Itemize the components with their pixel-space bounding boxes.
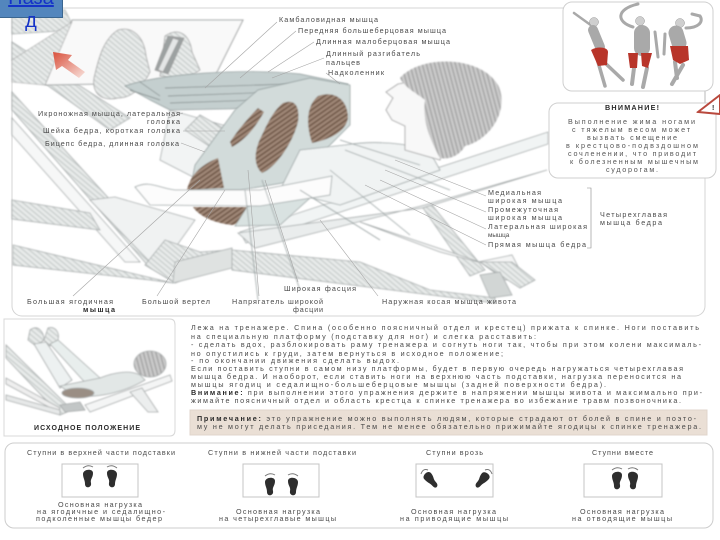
column: feet at top of platform: Основная нагрузка [58,500,142,509]
labels: upper muscle names: Надколенник [328,68,385,77]
labels: upper muscle names: пальцев [326,58,360,67]
labels: quadriceps group: Латеральная широкая [488,222,587,231]
illustration: woman's head [386,62,502,160]
column: feet together: Основная нагрузка [580,507,664,516]
panel: foot positions [5,443,713,528]
labels: lower muscle names: фасции [293,305,323,314]
labels: left muscle names: Бицепс бедра, длинная головка [45,139,179,148]
muscle: gluteus [193,207,247,225]
warning text: вызвать смещение [587,133,677,142]
labels: quadriceps group: мышца [488,232,510,239]
column: feet together: на отводящие мышцы [572,514,672,523]
labels: quadriceps group: Прямая мышца бедра [488,240,586,249]
labels: lower muscle names [27,284,516,314]
illustration: starting position drawing [6,328,172,415]
icon: feet low [265,474,298,495]
column: feet apart: на приводящие мышцы [400,514,508,523]
labels: upper muscle names: Передняя большеберцовая мышца [298,26,446,35]
warning text [566,103,698,174]
icon: red arrow [53,52,85,78]
muscle: middle quadriceps [256,102,298,173]
text block: instructions: на специальную платформу (подставку для ног) и слегка расставить: [191,332,536,341]
text block: instructions: Если поставить ступни в самом низу платформы, будет в первую очередь нагружаться четырехглавая [191,364,683,373]
note text: му не могут делать приседания. Тем не менее обязательно прижимайте ягодицы к спинке тренажера. [197,422,701,431]
column: feet at top of platform: подколенные мышцы бедер [36,514,162,523]
illustration: foot platform [12,20,243,85]
column: feet at top of platform [27,448,175,523]
labels: left muscle names: головка [147,117,180,126]
text block: instructions [191,323,703,405]
illustration: thighs and muscles [187,78,350,225]
labels: quadriceps group: широкая мышца [488,213,562,222]
labels: quadriceps group: Четырехглавая [600,210,667,219]
icon: feet apart [421,470,492,490]
text block: instructions: - по окончании движения сделать выдох. [191,356,399,365]
labels: lower muscle names: Большая ягодичная [27,297,113,306]
figure: front pose [621,4,658,87]
column: feet at bottom of platform: Основная нагрузка [236,507,320,516]
column: feet apart [400,448,508,523]
labels: lower muscle names: Напрягатель широкой [232,297,323,306]
text block: instructions: мышцы ягодиц и седалищно-большеберцовые мышцы (задней поверхности бедра). [191,380,606,389]
warning text: к болезненным мышечным [570,157,698,166]
muscle: hamstring [187,158,224,190]
warning text: сочленении, что приводит [568,149,697,158]
icon: feet together [612,468,638,489]
labels: left muscle names [38,109,180,148]
labels: left muscle names: Икроножная мышца, латеральная [38,109,180,118]
figure: side pose [574,13,623,86]
labels: lower muscle names: Наружная косая мышца живота [382,297,516,306]
warning text: ВНИМАНИЕ! [605,103,659,112]
labels: upper muscle names [279,15,450,77]
labels: quadriceps group [488,188,667,249]
illustration: leg press machine [12,10,548,303]
labels: upper muscle names: Длинный разгибатель [326,49,420,58]
labels: quadriceps group: Промежуточная [488,205,558,214]
text block: instructions: но опустились к груди, затем вернуться в исходное положение; [191,349,503,358]
panel: main illustration [12,8,705,316]
text block: instructions: мышца бедра. И наоборот, если ставить ноги на верхнюю часть подставки, нагрузка переносится на [191,372,681,381]
column: feet at bottom of platform [208,448,356,523]
text block: instructions: жимайте поясничный отдел и область крестца к спинке тренажера во избежание травм позвоночника. [191,396,681,405]
labels: quadriceps group: широкая мышца [488,196,562,205]
column: feet at bottom of platform: на четырехглавые мышцы [219,514,336,523]
column: feet apart: Основная нагрузка [411,507,496,516]
note text: Примечание: это упражнение можно выполнять людям, которые страдают от болей в спине и поэто- [197,414,697,423]
text block: instructions: - сделать вдох, разблокировать раму тренажера и согнуть ноги так, чтобы при этом колени максималь- [191,340,702,349]
labels: lower muscle names: Большой вертел [142,297,210,306]
leader lines [73,22,705,296]
column: feet at bottom of platform: Ступни в нижней части подставки [208,448,356,457]
column: feet apart: Ступни врозь [426,448,483,457]
panel: muscle map figures [563,2,713,91]
muscle: side thigh [230,108,264,147]
warning text: Выполнение жима ногами [568,117,695,126]
labels: lower muscle names: Широкая фасция [284,284,356,293]
labels: left muscle names: Шейка бедра, короткая головка [43,126,180,135]
illustration: shins [125,72,348,110]
column: feet at top of platform: на ягодичные и седалищно- [37,507,166,516]
warning text: с тяжелым весом может [572,125,691,134]
icon: feet high [83,466,117,487]
labels: upper muscle names: Длинная малоберцовая мышца [316,37,450,46]
warning text: в крестцово-подвздошном [566,141,698,150]
muscle: right quadriceps [308,94,348,143]
panel: warning callout [549,95,720,178]
text block: instructions: Лежа на тренажере. Спина (особенно поясничный отдел и крестец) прижата к спинке. Ноги поставить [191,323,699,332]
column: feet together: Ступни вместе [592,448,653,457]
icon: warning triangle: ! [712,105,714,112]
illustration: shoes [94,29,200,99]
labels: quadriceps group: мышца бедра [600,218,662,227]
illustration: torso and arm [135,140,450,300]
note text [197,414,701,431]
button: back link [0,0,63,18]
text block: instructions: Внимание: при выполнении этого упражнения держите в напряжении мышцы живота и максимально при- [191,388,703,397]
labels: lower muscle names: мышца [83,305,116,314]
figure: back pose [664,14,701,84]
labels: quadriceps group: Медиальная [488,188,541,197]
panel: starting position [4,319,175,436]
column: feet together [572,448,672,523]
warning text: судорогам. [606,165,658,174]
caption: starting position: ИСХОДНОЕ ПОЛОЖЕНИЕ [34,425,140,432]
icon: warning triangle [698,95,720,114]
column: feet at top of platform: Ступни в верхней части подставки [27,448,175,457]
labels: upper muscle names: Камбаловидная мышца [279,15,378,24]
callout: note [190,410,707,435]
